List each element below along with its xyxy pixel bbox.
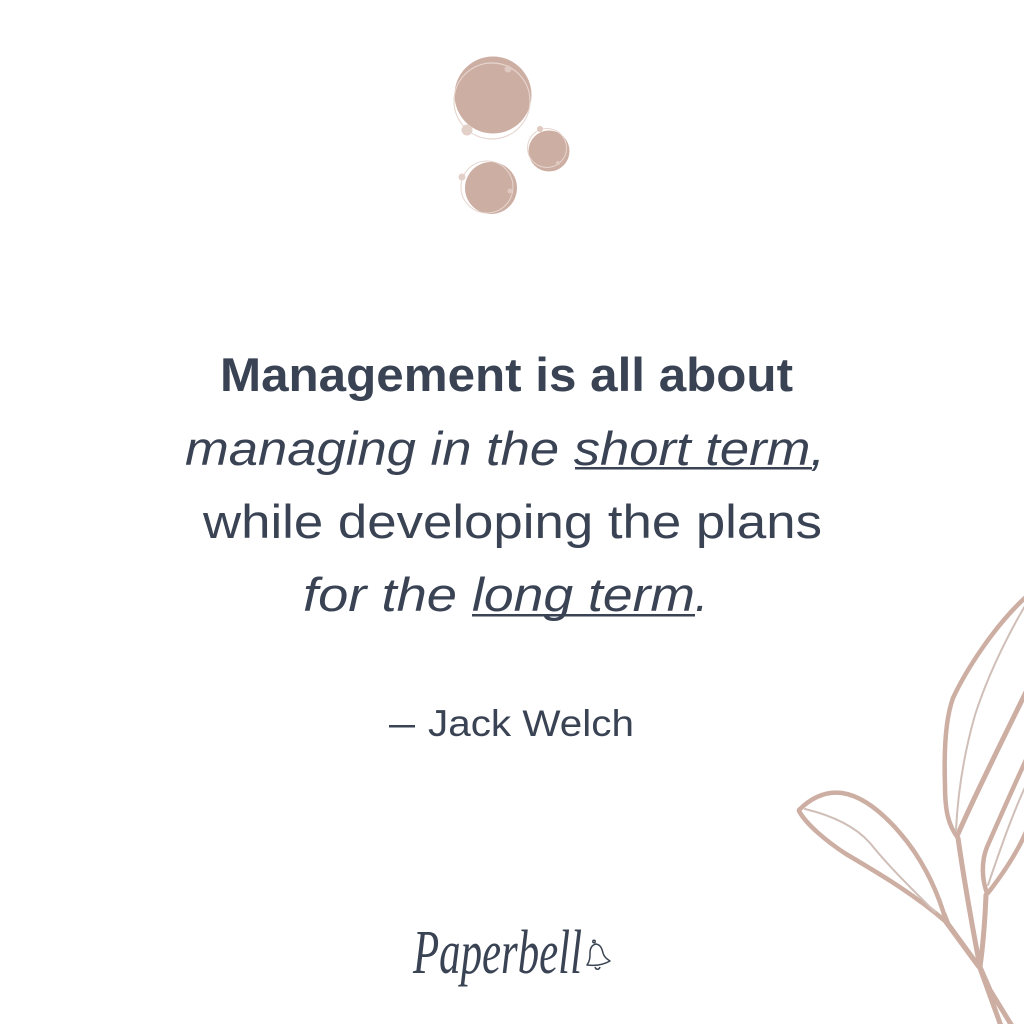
icon: three circles <box>454 56 570 214</box>
quote text: . <box>695 568 708 621</box>
quote text: long term <box>472 568 695 621</box>
quote text: while developing the plans <box>202 495 822 548</box>
icon: bell <box>587 940 610 969</box>
quote text: managing in the short term, <box>185 422 825 475</box>
quote text <box>185 348 825 621</box>
attribution: Jack Welch <box>428 703 634 744</box>
quote text: Management is all about <box>220 348 793 401</box>
leaf illustration <box>799 597 1024 1024</box>
logo: Paperbell <box>412 919 582 987</box>
quote text: for the <box>303 568 457 621</box>
